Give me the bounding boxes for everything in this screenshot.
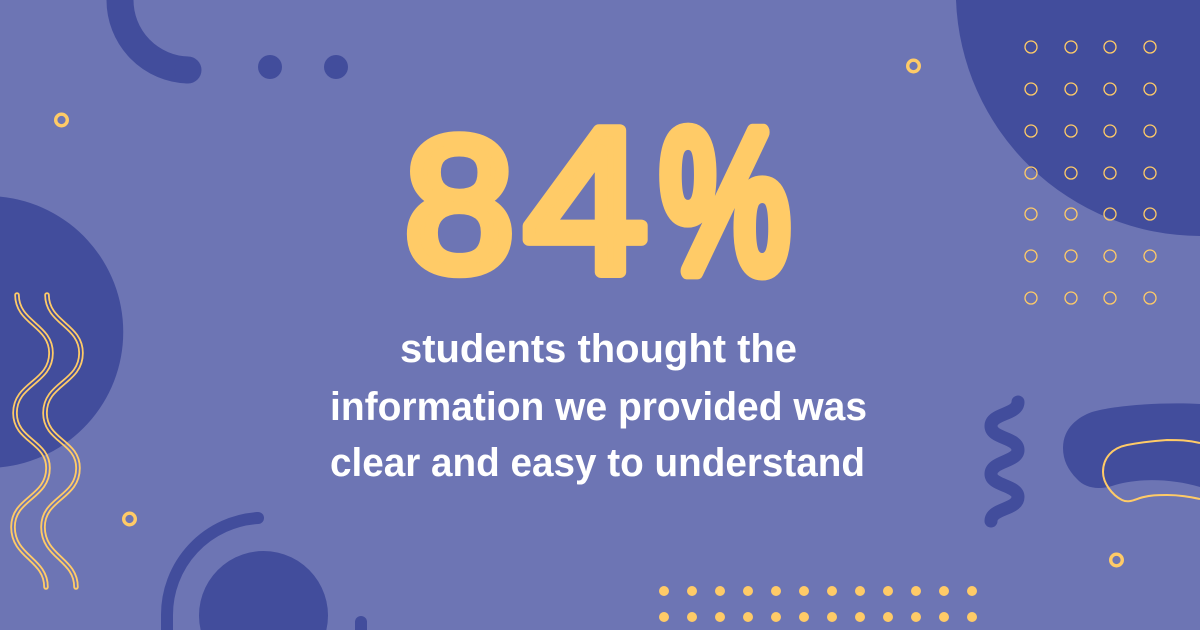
description text: information we provided was — [330, 385, 867, 429]
shape: right blob — [1063, 403, 1200, 488]
shape: left circle — [0, 197, 123, 467]
shape: yellow blob outline — [1103, 440, 1200, 501]
shape: right squiggle — [991, 402, 1018, 521]
shape: bottom circle — [199, 551, 328, 630]
shape: top-left arc — [120, 0, 202, 84]
dots: top pair — [258, 55, 348, 79]
big number: 84%: 8 — [405, 99, 514, 310]
big number: 84%: % — [660, 89, 790, 315]
description text: clear and easy to understand — [330, 441, 865, 485]
shape: top-right circle — [956, 0, 1200, 236]
description text — [330, 327, 867, 485]
icon: wavy double lines — [13, 295, 81, 587]
ring grid — [1025, 41, 1156, 304]
shape: bottom stub — [355, 616, 367, 630]
dot grid: bottom — [659, 586, 977, 622]
shape: bottom arc — [167, 512, 264, 630]
big number: 84%: 4 — [524, 87, 648, 316]
big number: 84% — [405, 87, 790, 316]
rings: small yellow — [56, 60, 1122, 566]
description text: students thought the — [400, 327, 797, 371]
